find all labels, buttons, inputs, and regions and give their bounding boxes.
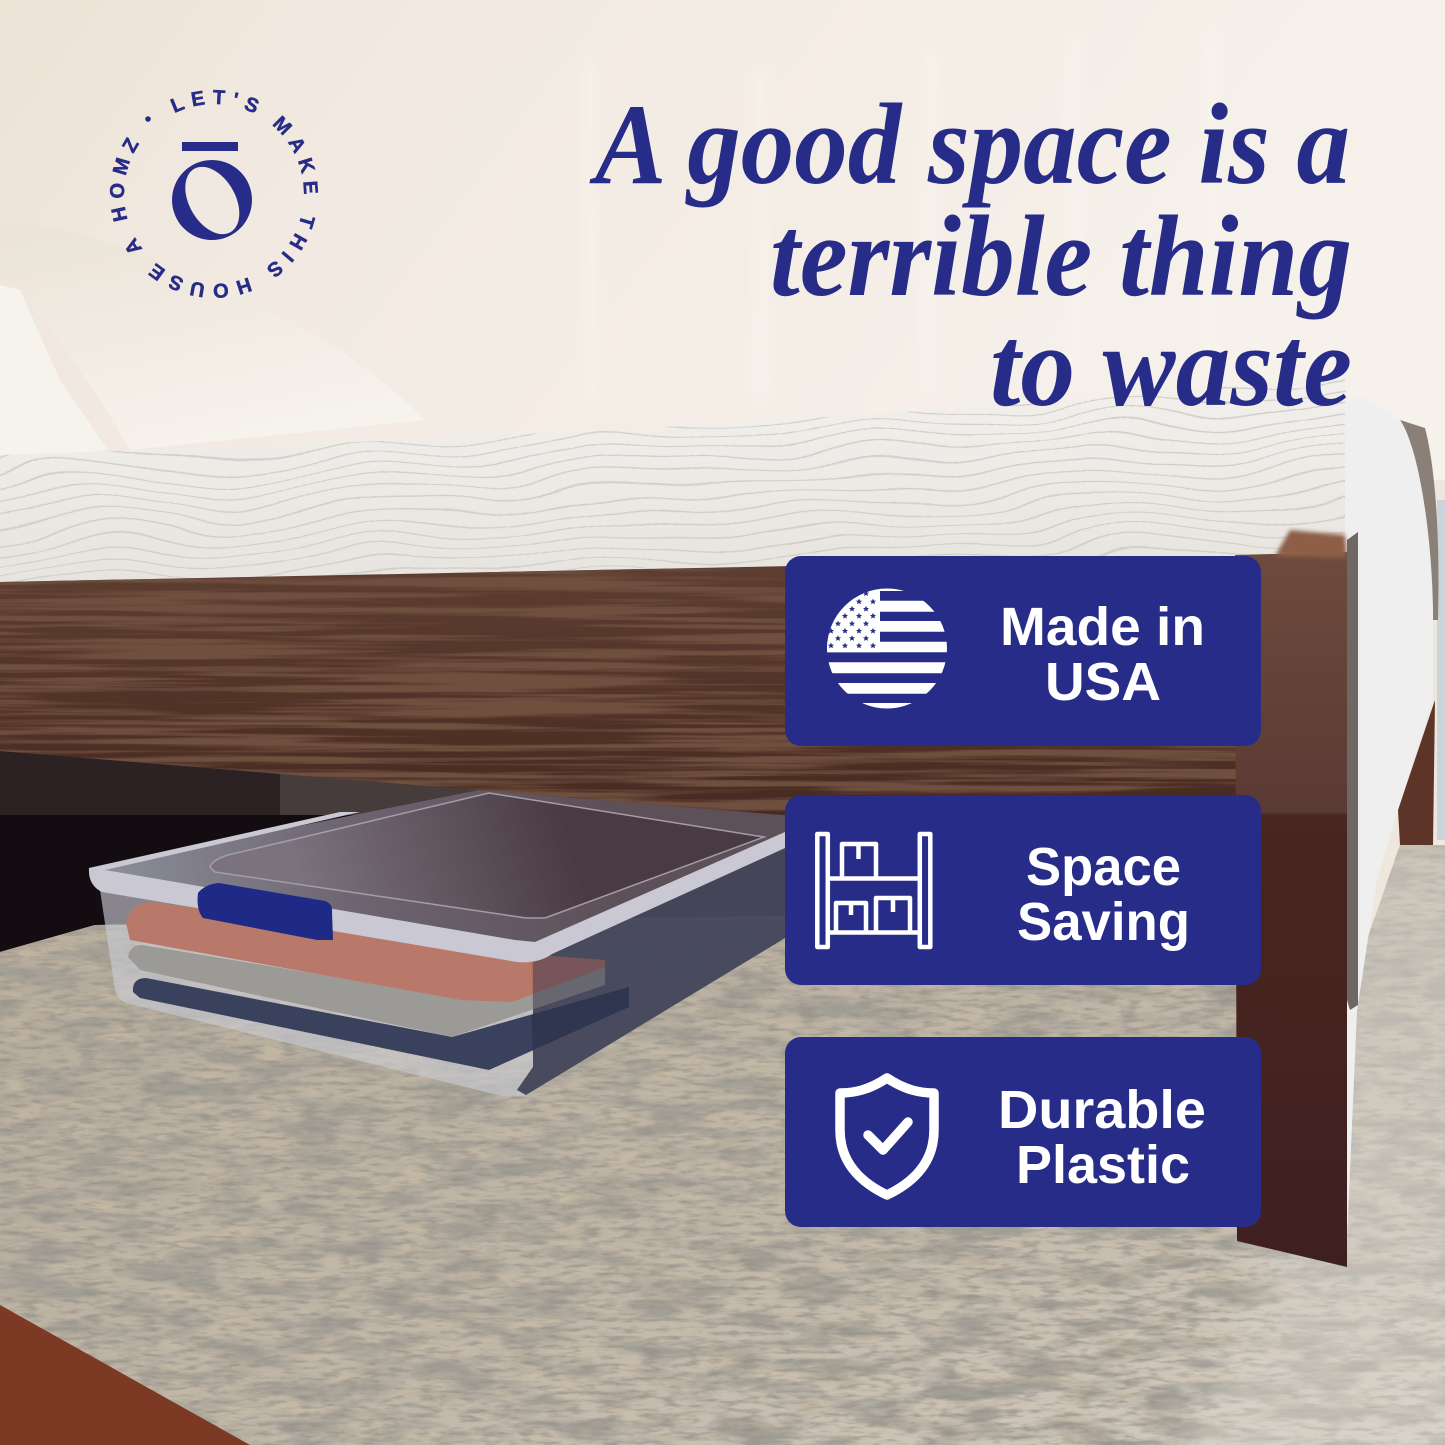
icon: shield with check xyxy=(840,1078,934,1195)
badge text xyxy=(998,1080,1206,1195)
mattress side panel xyxy=(1345,397,1433,1240)
badge text: Durable xyxy=(998,1080,1206,1140)
pink folded clothing xyxy=(126,902,605,1002)
pillow back xyxy=(0,285,108,460)
navy folded clothing xyxy=(133,978,629,1070)
icon: USA flag xyxy=(827,588,947,711)
wall xyxy=(0,0,1445,480)
mattress xyxy=(0,380,1346,582)
storage box xyxy=(89,788,800,1096)
frame edge xyxy=(1347,532,1358,1010)
badge text xyxy=(1000,597,1205,712)
logo dot xyxy=(145,116,151,122)
pale floor strip at far right xyxy=(1437,500,1445,840)
headline xyxy=(589,81,1352,431)
logo bar xyxy=(182,142,238,151)
headline: A good space is a xyxy=(589,81,1350,209)
icon: warehouse shelf xyxy=(817,834,930,947)
bed xyxy=(0,340,1438,1267)
lid xyxy=(89,788,800,960)
headline: to waste xyxy=(990,303,1352,431)
badge text: Made in xyxy=(1000,597,1205,657)
bed corner leg xyxy=(1235,552,1347,1267)
side tint over clothes xyxy=(517,848,785,1095)
back leg column xyxy=(280,772,500,815)
grey folded clothing xyxy=(128,945,605,1037)
badge text: USA xyxy=(1045,652,1161,712)
window panes xyxy=(590,30,1210,400)
badge: space saving xyxy=(785,795,1261,985)
logo mark xyxy=(172,157,252,244)
far leg xyxy=(1398,700,1435,846)
lid rim xyxy=(89,812,785,962)
dark under bed xyxy=(0,745,1240,952)
outer frame strip xyxy=(1400,420,1438,620)
pillow xyxy=(0,222,425,450)
badge text: Saving xyxy=(1017,892,1190,952)
badge: durable plastic xyxy=(785,1037,1261,1227)
badge text xyxy=(1017,837,1190,952)
logo circular text: LET'S MAKE THIS HOUSE A HOMZ xyxy=(110,90,318,298)
box front tint xyxy=(100,890,533,1095)
headline: terrible thing xyxy=(770,193,1352,321)
box side shade xyxy=(517,848,785,1095)
bed rail xyxy=(0,566,1236,816)
badge: made in USA xyxy=(785,556,1261,746)
logo xyxy=(110,90,318,298)
leg corner highlight xyxy=(1275,530,1347,558)
badge text: Space xyxy=(1026,837,1181,897)
wood floor corner xyxy=(0,1305,250,1445)
lid raised panel xyxy=(210,793,764,918)
box body xyxy=(100,845,785,1096)
blue latch xyxy=(198,883,333,940)
badge text: Plastic xyxy=(1016,1135,1190,1195)
rug xyxy=(0,820,1445,1445)
under bed lighter band xyxy=(0,750,790,815)
